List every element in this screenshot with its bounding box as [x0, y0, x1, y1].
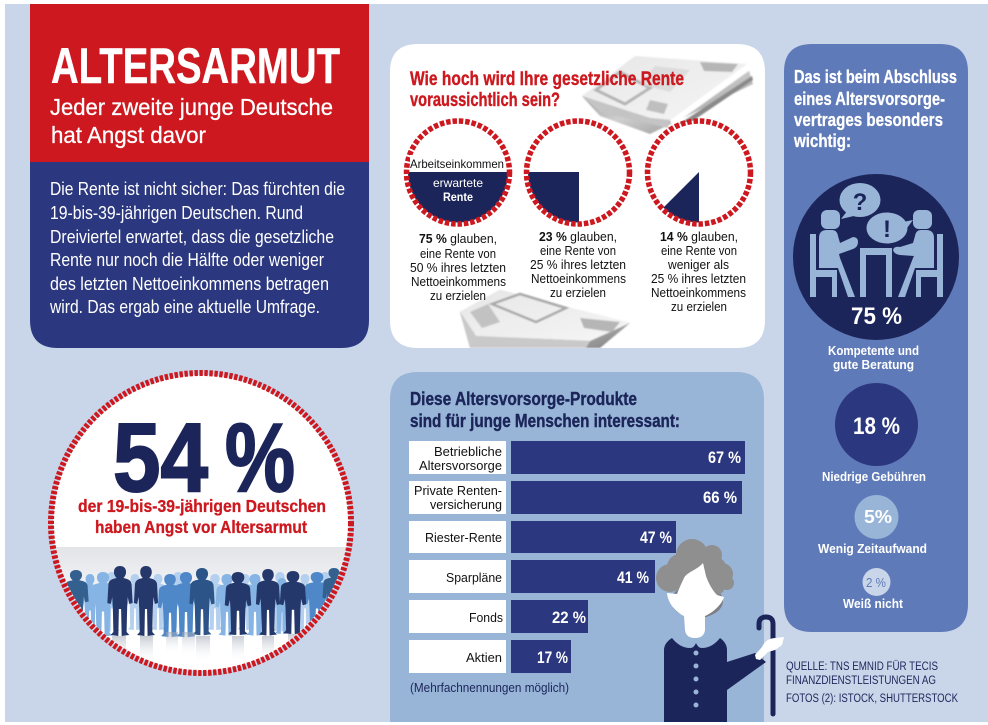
body	[664, 638, 766, 722]
hair	[656, 539, 734, 595]
caption: 75 percent: 75 % glauben,	[419, 232, 497, 246]
bar: Sparpläne: 41 %	[617, 568, 649, 587]
heading: wichtig:	[793, 130, 851, 151]
bar: Fonds	[409, 600, 588, 633]
cane	[759, 617, 773, 714]
caption: 23 percent: 25 % ihres letzten	[530, 258, 626, 272]
big number: %	[225, 403, 295, 512]
bar: Aktien: Aktien	[466, 650, 502, 665]
hand	[755, 637, 784, 660]
icon: consultation	[810, 183, 943, 297]
subtitle: hat Angst davor	[51, 122, 206, 148]
caption: 23 percent: Nettoeinkommens	[531, 272, 626, 286]
panel: 54 percent circle	[50, 373, 352, 673]
factor: little time	[818, 495, 927, 556]
caption: 75 percent: eine Rente von	[420, 247, 496, 261]
factor: low fees: 18 %	[853, 413, 900, 440]
subtitle	[50, 94, 333, 148]
intro text	[49, 179, 345, 317]
source credits: QUELLE: TNS EMNID FÜR TECIS	[786, 661, 938, 673]
factor: don't know: 2 %	[866, 575, 886, 590]
circle caption: der 19-bis-39-jährigen Deutschen	[78, 496, 326, 516]
intro text: 19-bis-39-jährigen Deutschen. Rund	[50, 203, 303, 223]
footnote: (Mehrfachnennungen möglich)	[410, 681, 569, 695]
bar: Aktien	[409, 640, 571, 673]
bar: Private Rentenversicherung: 66 %	[703, 488, 737, 507]
intro text: Rente nur noch die Hälfte oder weniger	[50, 250, 324, 270]
circle caption	[78, 496, 326, 537]
source credits	[786, 661, 958, 705]
caption: 14 percent: 25 % ihres letzten	[651, 272, 746, 286]
factor: don't know	[843, 568, 904, 611]
bar: Riester-Rente: 47 %	[640, 528, 672, 547]
heading: vertrages besonders	[794, 109, 943, 130]
bar: Private Rentenversicherung: versicherung	[430, 497, 502, 512]
heading: Diese Altersvorsorge-Produkte	[410, 389, 637, 409]
bar: Private Rentenversicherung	[409, 481, 742, 514]
bar: Fonds: Fonds	[469, 610, 503, 625]
factor: competent advice: 75 %	[851, 303, 902, 330]
circle caption: haben Angst vor Altersarmut	[95, 517, 307, 537]
heading	[793, 66, 957, 151]
chart: 50 percent circle: erwartete	[433, 176, 483, 190]
caption: 23 percent: zu erzielen	[550, 286, 606, 300]
chart: 50 percent circle: Arbeitseinkommen	[410, 157, 504, 171]
panel: important factors	[784, 44, 968, 632]
panel: expected pension	[390, 44, 765, 348]
heading: eines Altersvorsorge-	[794, 88, 945, 109]
back hair	[671, 584, 723, 618]
bar chart	[409, 441, 745, 673]
caption: 14 percent: Nettoeinkommens	[651, 286, 746, 300]
panel: products	[390, 372, 764, 722]
factor: competent advice	[793, 174, 959, 372]
intro text: Die Rente ist nicht sicher: Das fürchten die	[50, 179, 345, 199]
bar: Sparpläne	[409, 560, 655, 593]
heading	[410, 68, 684, 111]
panel: introduction	[30, 162, 369, 348]
bar: Fonds: 22 %	[552, 608, 586, 627]
chart: 50 percent circle: Rente	[443, 190, 473, 204]
caption: 23 percent	[530, 230, 626, 300]
bar: Betriebliche Altersvorsorge: 67 %	[708, 448, 741, 467]
bar: Riester-Rente: Riester-Rente	[425, 530, 502, 545]
caption: 23 percent: 23 % glauben,	[539, 230, 617, 244]
caption: 75 percent: zu erzielen	[430, 289, 486, 303]
illustration: elderly woman with cane	[656, 539, 784, 722]
factor: competent advice: gute Beratung	[833, 358, 914, 372]
source credits: FOTOS (2): ISTOCK, SHUTTERSTOCK	[786, 693, 958, 705]
caption: 14 percent: weniger als	[667, 258, 729, 272]
bar: Aktien: 17 %	[537, 648, 568, 667]
panel: title	[30, 4, 369, 162]
buttons	[694, 650, 698, 708]
chart: under 25 percent circle	[647, 120, 751, 240]
photo: crowd of people	[56, 547, 346, 654]
chart: 25 percent circle	[520, 120, 630, 232]
face and neck	[667, 563, 724, 638]
heading: sind für junge Menschen interessant:	[410, 411, 680, 431]
caption: 23 percent: eine Rente von	[540, 244, 616, 258]
big number: 54	[113, 403, 208, 512]
bar: Sparpläne: Sparpläne	[446, 570, 502, 585]
caption: 14 percent: eine Rente von	[661, 244, 737, 258]
bar: Private Rentenversicherung: Private Renten-	[414, 483, 502, 498]
source credits: FINANZDIENSTLEISTUNGEN AG	[786, 675, 936, 687]
caption: 14 percent: 14 % glauben,	[660, 230, 738, 244]
chart: 50 percent circle	[400, 120, 516, 232]
big number	[113, 403, 295, 512]
caption: 14 percent: zu erzielen	[671, 300, 727, 314]
intro text: Dreiviertel erwartet, dass die gesetzliche	[50, 227, 334, 247]
bar: Betriebliche Altersvorsorge	[409, 441, 745, 474]
icon: exclamation bubble: !	[883, 216, 891, 243]
caption: 75 percent	[410, 232, 506, 303]
caption: 75 percent: Nettoeinkommens	[411, 275, 506, 289]
heading: Wie hoch wird Ihre gesetzliche Rente	[410, 68, 684, 90]
caption: 14 percent	[651, 230, 746, 314]
caption: 75 percent: 50 % ihres letzten	[410, 261, 506, 275]
intro text: wird. Das ergab eine aktuelle Umfrage.	[49, 297, 320, 317]
factor: low fees: Niedrige Gebühren	[822, 470, 926, 484]
intro text: des letzten Nettoeinkommens betragen	[50, 274, 329, 294]
factor: don't know: Weiß nicht	[843, 597, 904, 611]
heading	[410, 389, 680, 431]
bar: Betriebliche Altersvorsorge: Altersvorsorge	[419, 458, 502, 473]
icon: question bubble: ?	[853, 189, 867, 216]
title: ALTERSARMUT	[51, 38, 340, 94]
photo: banknote stacks	[460, 56, 753, 348]
subtitle: Jeder zweite junge Deutsche	[50, 94, 333, 120]
dashed red ring	[51, 373, 351, 673]
bar: Betriebliche Altersvorsorge: Betriebliche	[434, 444, 502, 459]
factor: little time: 5%	[864, 507, 892, 527]
factor: little time: Wenig Zeitaufwand	[818, 542, 927, 556]
bar: Riester-Rente	[409, 521, 676, 553]
heading: voraussichtlich sein?	[410, 89, 560, 111]
factor: competent advice: Kompetente und	[828, 344, 919, 358]
factor: low fees	[822, 383, 926, 484]
